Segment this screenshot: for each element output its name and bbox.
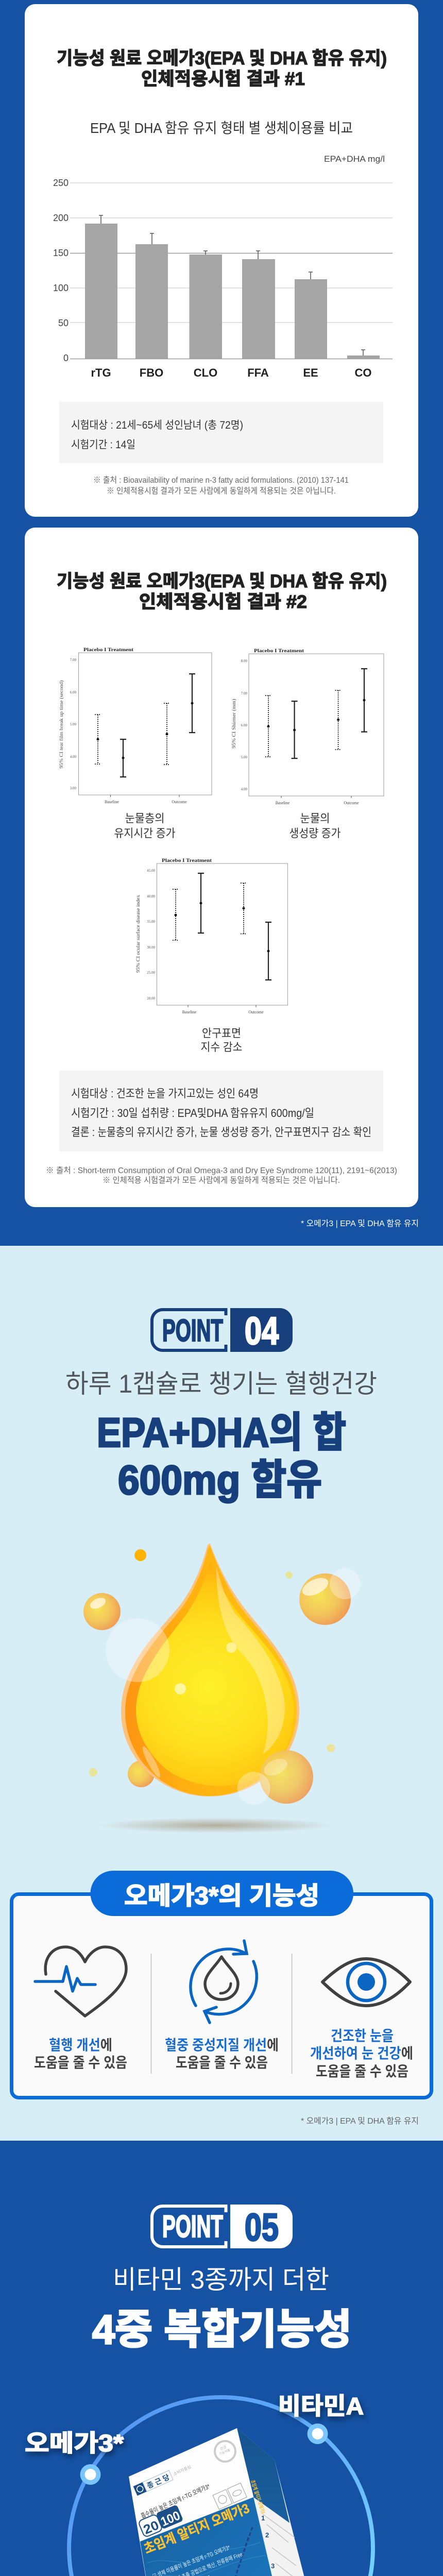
- bar chart: bioavailability: EE: [303, 366, 318, 379]
- bar chart: bioavailability: 100: [53, 283, 69, 293]
- badge: point 05: [152, 2205, 293, 2249]
- heading: point 04: [97, 1410, 346, 1503]
- heading: result 2: [57, 571, 387, 612]
- product box: [129, 2428, 318, 2576]
- info box: trial details 2: [59, 1071, 383, 1151]
- chart: tear film break up time: Outcome: [172, 800, 187, 804]
- chart: ocular surface disease index: 20.00: [147, 996, 156, 1001]
- chart: ocular surface disease index: Placebo I Treatment: [162, 858, 212, 863]
- product label text: 기능식품: [218, 2448, 231, 2456]
- product label text: 20: [141, 2518, 161, 2537]
- info box: trial details: [59, 402, 383, 463]
- label: vitamin A: 비타민A: [278, 2393, 364, 2419]
- heading: result 1: [57, 48, 387, 89]
- background: point 05 blue section: [0, 2141, 443, 2576]
- chart: tear film break up time: Placebo I Treatment: [83, 647, 133, 652]
- chart: ocular surface disease index: 35.00: [147, 920, 156, 924]
- panel: clinical result 2: [25, 528, 418, 1207]
- text: triglycerides: 도움을 줄 수 있음: [176, 2055, 268, 2071]
- icon: eye: [322, 1959, 410, 2006]
- source note 2: ※ 출처 : Short-term Consumption of Oral Omega-3 and Dry Eye Syndrome 120(11), 2191~6(2013): [46, 1166, 397, 1175]
- badge: point 04: [152, 1308, 293, 1352]
- heading: result 2: 인체적용시험 결과 #2: [139, 592, 307, 612]
- product label text: 100: [159, 2509, 182, 2529]
- diagram: four nutrients around product: [25, 2393, 398, 2576]
- badge: point 04: POINT: [162, 1313, 223, 1348]
- chart: shirmer: Outcome: [344, 801, 359, 805]
- text: blood circulation: 도움을 줄 수 있음: [34, 2055, 127, 2071]
- chart captions top: 생성량 증가: [289, 827, 341, 840]
- info box: trial details 2: 결론 : 눈물층의 유지시간 증가, 눈물 생성량 증가, 안구표면지구 감소 확인: [71, 1126, 371, 1139]
- chart captions top: 유지시간 증가: [114, 827, 175, 840]
- chart: tear film break up time: 6.00: [70, 690, 76, 694]
- chart: shirmer: 6.00: [241, 723, 247, 727]
- node: vitamin A: [308, 2424, 328, 2444]
- text: triglycerides: 혈중 중성지질 개선에: [165, 2037, 279, 2053]
- bar chart: bioavailability: rTG: [91, 366, 111, 379]
- icon: recycling drop: [191, 1941, 257, 2023]
- label: omega-3: 오메가3*: [25, 2430, 124, 2456]
- heading: point 04: EPA+DHA의 합: [97, 1410, 346, 1455]
- chart: ocular surface disease index: Outcome: [248, 1010, 264, 1014]
- source note: [93, 476, 349, 496]
- badge: point 04: 04: [245, 1309, 279, 1352]
- text: blood circulation: [34, 2037, 127, 2071]
- bar chart: bioavailability: 250: [53, 178, 69, 188]
- footnote: omega3 definition: * 오메가3 | EPA 및 DHA 함유 유지: [301, 2116, 419, 2126]
- chart captions top: 눈물층의: [125, 812, 165, 825]
- subheading: point 05: 비타민 3종까지 더한: [113, 2265, 329, 2294]
- chart caption bottom: 지수 감소: [201, 1041, 242, 1054]
- chart caption bottom: 안구표면: [202, 1027, 241, 1040]
- chart: ocular surface disease index: Baseline: [182, 1010, 197, 1014]
- bar chart: bioavailability: CO: [354, 366, 372, 379]
- source note 2: ※ 인체적용 시험결과가 모든 사람에게 동일하게 적용되는 것은 아닙니다.: [103, 1176, 340, 1185]
- product label text: 건강: [219, 2445, 227, 2451]
- product label text: 3: [271, 2562, 275, 2570]
- pill heading: 오메가3*의 기능성: [124, 1883, 319, 1910]
- background: top blue section: [0, 0, 443, 1246]
- chart unit: EPA+DHA mg/l: [324, 154, 385, 164]
- source note: ※ 출처 : Bioavailability of marine n-3 fatty acid formulations. (2010) 137-141: [93, 476, 349, 485]
- text: eye health: 개선하여 눈 건강에: [310, 2045, 413, 2061]
- chart: tear film break up time: 3.00: [70, 786, 76, 790]
- text: eye health: [310, 2028, 413, 2079]
- product label text: 종 근 당: [146, 2473, 171, 2490]
- chart: tear film break up time: 5.00: [70, 722, 76, 726]
- node: omega-3: [80, 2464, 101, 2485]
- chart captions top: [114, 812, 341, 840]
- heading: point 05: 4중 복합기능성: [92, 2307, 352, 2352]
- badge: point 05: 05: [245, 2206, 279, 2249]
- chart: shirmer: Placebo I Treatment: [254, 648, 304, 653]
- panel: omega-3 functions: [11, 1871, 432, 2098]
- chart: ocular surface disease index: 95% CI ocular surface disease index: [135, 894, 141, 973]
- chart: ocular surface disease index: 25.00: [147, 971, 156, 975]
- chart: shirmer: 95% CI Shirmer (mm): [231, 699, 236, 748]
- source note 2: [46, 1166, 397, 1185]
- product label text: 초임계 알티지 오메가3: [142, 2500, 251, 2557]
- chart: tear film break up time: 4.00: [70, 755, 76, 759]
- source note: ※ 인체적용시험 결과가 모든 사람에게 동일하게 적용되는 것은 아닙니다.: [107, 486, 336, 496]
- text: eye health: 도움을 줄 수 있음: [316, 2063, 408, 2079]
- chart: shirmer: 5.00: [241, 755, 247, 759]
- chart: shirmer: 8.00: [241, 659, 247, 663]
- icon: heart with pulse: [35, 1947, 126, 2016]
- illustration: oil drop: [83, 1544, 361, 1833]
- subheading: point 04: 하루 1캡슐로 챙기는 혈행건강: [65, 1369, 377, 1398]
- heading: point 04: 600mg 함유: [118, 1457, 322, 1503]
- text: triglycerides: [165, 2037, 279, 2071]
- text: eye health: 건조한 눈을: [331, 2028, 394, 2044]
- chart: shirmer: 7.00: [241, 691, 247, 696]
- bar chart: bioavailability: CLO: [194, 366, 217, 379]
- info box: trial details: 시험기간 : 14일: [71, 439, 135, 451]
- chart: ocular surface disease index: 40.00: [147, 894, 156, 899]
- background: point 04 pale blue section: [0, 1246, 443, 2141]
- chart: shirmer: Baseline: [276, 801, 290, 805]
- chart: tear film break up time: [59, 647, 212, 804]
- chart: tear film break up time: 95% CI tear film break up time (second): [59, 680, 64, 769]
- chart: shirmer: [231, 648, 384, 805]
- bar chart: bioavailability: 200: [53, 213, 69, 223]
- bar chart: bioavailability: FBO: [140, 366, 163, 379]
- product label text: [133, 2441, 301, 2576]
- text: blood circulation: 혈행 개선에: [49, 2037, 112, 2053]
- chart captions top: 눈물의: [300, 812, 330, 825]
- panel: clinical result 1: [25, 4, 418, 517]
- chart: shirmer: 4.00: [241, 787, 247, 791]
- bar chart: bioavailability: FFA: [247, 366, 269, 379]
- bar chart: bioavailability: [53, 178, 393, 379]
- chart: ocular surface disease index: 30.00: [147, 945, 156, 950]
- bar chart: bioavailability: 150: [53, 248, 69, 258]
- badge: point 05: POINT: [162, 2209, 223, 2244]
- chart: tear film break up time: Baseline: [105, 800, 119, 804]
- product label text: 소비자중심: [173, 2464, 192, 2477]
- info box: trial details: 시험대상 : 21세~65세 성인남녀 (총 72명): [71, 419, 243, 431]
- info box: trial details 2: 시험대상 : 건조한 눈을 가지고있는 성인 64명: [71, 1087, 259, 1100]
- chart: tear film break up time: 7.00: [70, 658, 76, 662]
- product label text: 초임계 알티지 오메가3: [249, 2479, 267, 2515]
- footnote: omega3 definition: * 오메가3 | EPA 및 DHA 함유 유지: [301, 1219, 419, 1228]
- pill heading: [91, 1871, 353, 1916]
- chart: ocular surface disease index: 45.00: [147, 869, 156, 873]
- product label text: 흡수율이 높은 초임계 r-TG 오메가3*: [140, 2483, 211, 2520]
- heading: result 1: 인체적용시험 결과 #1: [141, 69, 305, 89]
- info box: trial details 2: 시험기간 : 30일 섭취량 : EPA및DHA 함유유지 600mg/일: [71, 1107, 314, 1120]
- bar chart: bioavailability: 50: [58, 318, 69, 328]
- chart: ocular surface disease index: [135, 858, 287, 1014]
- heading: result 1: 기능성 원료 오메가3(EPA 및 DHA 함유 유지): [57, 48, 387, 69]
- heading: result 2: 기능성 원료 오메가3(EPA 및 DHA 함유 유지): [57, 571, 387, 591]
- product label text: 2: [265, 2531, 269, 2539]
- product label text: 1: [261, 2514, 265, 2522]
- chart subtitle: EPA 및 DHA 함유 유지 형태 별 생체이용률 비교: [90, 120, 353, 136]
- chart caption bottom: [201, 1027, 242, 1054]
- bar chart: bioavailability: 0: [63, 353, 69, 363]
